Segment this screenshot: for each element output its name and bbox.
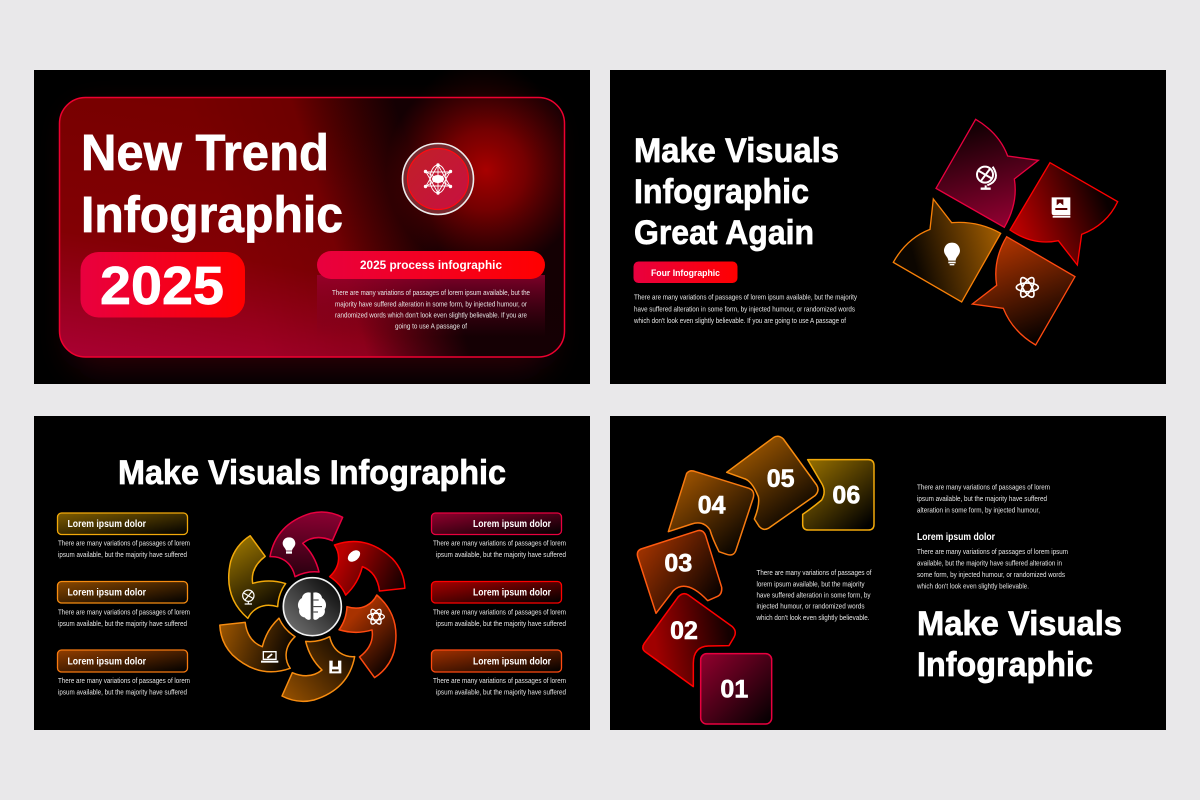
heading — [634, 132, 839, 252]
label: crimson: Lorem ipsum dolor — [473, 519, 551, 530]
label: red — [432, 582, 566, 628]
subheading and text: Lorem ipsum dolor — [917, 532, 995, 543]
petal: book — [1010, 163, 1118, 265]
panel: six part radial slide — [34, 416, 590, 730]
process callout: majority have suffered alteration in some form, by injected humour, or — [335, 302, 528, 308]
segment: atom — [323, 585, 415, 680]
year badge — [80, 252, 245, 318]
heading: Make Visuals — [634, 132, 839, 170]
petal: atom — [972, 237, 1075, 345]
top right description — [917, 484, 1050, 514]
label: gold: Lorem ipsum dolor — [68, 519, 146, 530]
process callout: randomized words which don't look even slightly believable. If you are — [335, 312, 527, 320]
left labels — [58, 513, 190, 696]
process callout: going to use A passage of — [395, 324, 467, 330]
top right description: alteration in some form, by injected humour, — [917, 508, 1040, 514]
label: orange red: ipsum available, but the majority have suffered — [436, 690, 566, 696]
process callout — [317, 251, 545, 337]
label: gold: ipsum available, but the majority have suffered — [58, 552, 187, 559]
label: crimson: ipsum available, but the majority have suffered — [436, 552, 566, 559]
description: which don't look even slightly believable. If you are going to use A passage of — [633, 318, 846, 325]
label: red: There are many variations of passages of lorem — [433, 610, 566, 616]
outer red glow — [70, 70, 570, 370]
centre description — [756, 570, 872, 622]
label: dark orange: There are many variations of passages of lorem — [58, 678, 190, 685]
segment: football — [317, 523, 409, 618]
step 02: 02 — [670, 617, 698, 645]
label: orange red: There are many variations of passages of lorem — [433, 678, 566, 685]
step 01: 01 — [720, 676, 748, 704]
title — [81, 124, 343, 243]
description: There are many variations of passages of lorem ipsum available, but the majority — [634, 294, 857, 302]
top right description: ipsum available, but the majority have suffered — [917, 496, 1047, 503]
step 05: 05 — [767, 465, 795, 493]
heading: Infographic — [917, 646, 1093, 684]
icon: star network in circle — [402, 144, 474, 214]
step 04 — [668, 471, 754, 555]
subheading and text: There are many variations of passages of lorem ipsum — [917, 549, 1068, 556]
label: red: ipsum available, but the majority have suffered — [436, 621, 566, 628]
panel: new trend cover slide — [34, 70, 590, 384]
process callout: There are many variations of passages of lorem ipsum available, but the — [332, 290, 530, 297]
label: gold: There are many variations of passages of lorem — [58, 540, 190, 548]
petal: bulb — [893, 199, 1001, 302]
label: dark orange: Lorem ipsum dolor — [68, 656, 146, 668]
step 06: 06 — [832, 481, 860, 509]
label: orange: There are many variations of passages of lorem — [58, 610, 190, 616]
centre hub: brain — [283, 578, 341, 636]
label: red: Lorem ipsum dolor — [473, 588, 551, 598]
segment: laptop — [215, 595, 308, 691]
subheading and text: available, but the majority have suffered alteration in — [917, 560, 1062, 568]
subheading and text: which don't look even slightly believable. — [916, 584, 1029, 590]
heading: Make Visuals Infographic — [118, 454, 506, 492]
process callout: 2025 process infographic — [360, 258, 502, 272]
label: orange red — [432, 650, 566, 696]
title: New Trend — [81, 124, 329, 181]
step 06 — [803, 460, 874, 530]
panel: four infographic slide — [610, 70, 1166, 384]
step 03: 03 — [664, 550, 692, 578]
subheading and text: some form, by injected humour, or randomized words — [917, 572, 1065, 579]
label: crimson — [432, 513, 566, 559]
gradient card — [58, 96, 566, 358]
subheading and text — [916, 532, 1068, 590]
right labels — [432, 513, 566, 696]
centre description: have suffered alteration in some form, by — [756, 592, 871, 600]
label: dark orange — [58, 650, 190, 696]
segment: book — [282, 637, 355, 701]
label: orange red: Lorem ipsum dolor — [473, 656, 551, 668]
step 04: 04 — [698, 492, 726, 520]
heading: Great Again — [634, 214, 814, 252]
panel: six step slide — [610, 416, 1166, 730]
description — [633, 294, 857, 325]
step 03 — [637, 530, 722, 613]
step 01 — [701, 654, 772, 724]
centre description: lorem ipsum available, but the majority — [756, 582, 865, 588]
label: orange: ipsum available, but the majority have suffered — [58, 621, 187, 628]
heading — [917, 605, 1122, 684]
label pill — [634, 262, 738, 283]
top right description: There are many variations of passages of lorem — [917, 484, 1050, 492]
year badge: 2025 — [100, 256, 224, 316]
radial swirl diagram — [209, 512, 415, 701]
segment: globe — [209, 533, 302, 628]
label: crimson: There are many variations of passages of lorem — [433, 540, 566, 548]
centre description: injected humour, or randomized words — [756, 604, 865, 610]
step 02 — [643, 594, 735, 687]
segment: bulb — [270, 512, 343, 577]
label: gold — [58, 513, 190, 559]
label pill: Four Infographic — [651, 268, 720, 279]
numbered step chain — [637, 436, 874, 724]
heading: Infographic — [634, 173, 809, 211]
description: have suffered alteration in some form, by injected humour, or randomized words — [634, 306, 855, 314]
label: orange — [58, 582, 190, 628]
label: orange: Lorem ipsum dolor — [68, 588, 146, 598]
step 05 — [727, 436, 818, 529]
petal: globe — [936, 119, 1038, 227]
label: dark orange: ipsum available, but the majority have suffered — [58, 690, 187, 696]
title: Infographic — [81, 186, 343, 243]
four petal diagram — [893, 119, 1118, 345]
heading: Make Visuals — [917, 605, 1122, 643]
centre description: which don't look even slightly believable. — [756, 615, 870, 622]
centre description: There are many variations of passages of — [756, 570, 872, 577]
